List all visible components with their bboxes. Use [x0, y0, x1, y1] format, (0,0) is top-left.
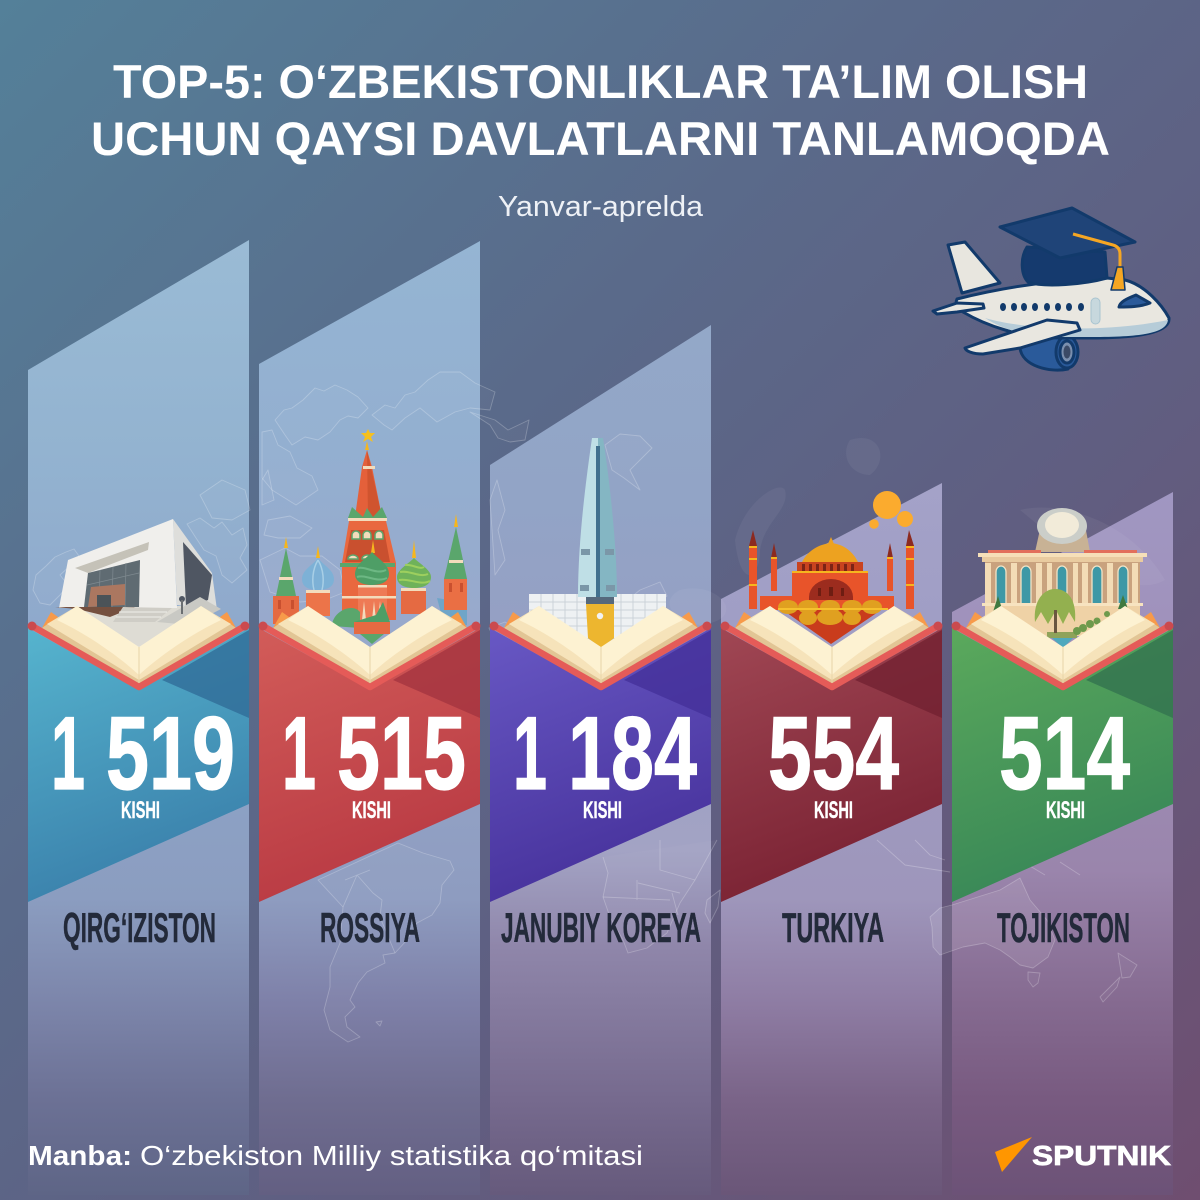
- values: 514: [999, 696, 1130, 812]
- logo: Sputnik: [995, 1137, 1171, 1172]
- building: Lotte World Tower: [529, 438, 666, 648]
- values: 554: [768, 696, 899, 812]
- unit labels: [121, 797, 1085, 824]
- panel: South Korea band: [490, 628, 711, 902]
- country names: ROSSIYA: [320, 904, 420, 951]
- building: Tajikistan palace: [978, 508, 1147, 648]
- icon: airplane with graduation cap: [933, 208, 1169, 370]
- panel: Kyrgyzstan band: [28, 628, 249, 902]
- logo: Sputnik: SPUTNIK: [1032, 1140, 1171, 1171]
- world map backdrop: [33, 372, 1137, 1042]
- country names: JANUBIY KOREYA: [501, 904, 701, 951]
- source: Manba:: [28, 1140, 132, 1171]
- title: [91, 55, 1110, 165]
- icon: open book Tajikistan: [952, 606, 1174, 687]
- title: TOP-5: O‘ZBEKISTONLIKLAR TA’LIM OLISH: [113, 55, 1088, 108]
- icon: open book South Korea: [490, 606, 712, 687]
- building: Kyrgyzstan White House: [55, 519, 221, 652]
- panel: Tajikistan band: [952, 628, 1173, 902]
- building: Hagia Sophia: [749, 491, 914, 644]
- country names: QIRG‘IZISTON: [63, 904, 216, 951]
- unit labels: KISHI: [583, 797, 622, 824]
- source: O‘zbekiston Milliy statistika qo‘mitasi: [140, 1140, 643, 1171]
- values: 1: [51, 696, 85, 812]
- unit labels: KISHI: [121, 797, 160, 824]
- map blobs: Siberia and Asia shadows: [670, 438, 1165, 625]
- country names: TURKIYA: [782, 904, 884, 951]
- title: UCHUN QAYSI DAVLATLARNI TANLAMOQDA: [91, 112, 1110, 165]
- unit labels: KISHI: [1046, 797, 1085, 824]
- values: 184: [568, 696, 697, 812]
- icon: open book Turkey: [720, 606, 942, 687]
- values: 515: [337, 696, 466, 812]
- values: 1: [282, 696, 316, 812]
- values: [51, 696, 1130, 812]
- unit labels: KISHI: [352, 797, 391, 824]
- values: 1: [513, 696, 547, 812]
- subtitle: Yanvar-aprelda: [498, 191, 704, 223]
- panel: column backgrounds: [28, 240, 1173, 1195]
- icon: open book Kyrgyzstan: [28, 606, 250, 687]
- unit labels: KISHI: [814, 797, 853, 824]
- values: 519: [106, 696, 235, 812]
- country names: [63, 904, 1130, 951]
- icon: open book Russia: [258, 606, 480, 687]
- panel: Turkey band: [721, 628, 942, 902]
- panel: Russia band: [259, 628, 480, 902]
- building: St Basil's Cathedral: [273, 429, 467, 644]
